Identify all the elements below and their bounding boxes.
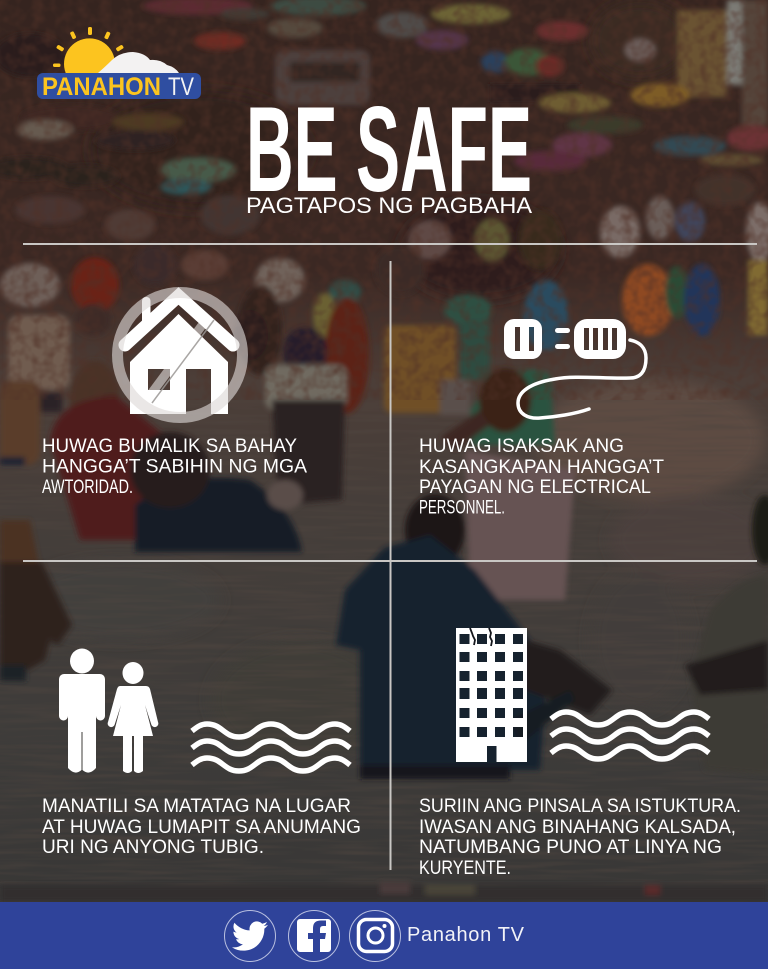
- text block: panel 1: HUWAG BUMALIK SA BAHAY: [42, 436, 297, 457]
- footer bar: [0, 902, 768, 969]
- panel: do not plug appliances: [419, 319, 664, 518]
- text block: panel 2: [419, 436, 664, 518]
- icon: cracked building: [456, 628, 527, 762]
- logo: Panahon TV: TV: [168, 73, 194, 101]
- text block: panel 3: MANATILI SA MATATAG NA LUGAR: [42, 796, 351, 817]
- text block: panel 4: KURYENTE.: [419, 858, 511, 879]
- text block: panel 1: AWTORIDAD.: [42, 477, 133, 498]
- text block: panel 4: NATUMBANG PUNO AT LINYA NG: [419, 837, 722, 858]
- text block: panel 4: [419, 796, 741, 879]
- footer label: Panahon TV: [407, 924, 525, 946]
- text block: panel 2: PAYAGAN NG ELECTRICAL: [419, 477, 651, 498]
- top-right crowd: [677, 10, 727, 97]
- divider lines: [23, 243, 757, 870]
- panel: inspect damage: [419, 628, 741, 879]
- icon: man and woman: [59, 648, 158, 773]
- text block: panel 2: HUWAG ISAKSAK ANG: [419, 436, 624, 457]
- foreground figures lower: [0, 562, 72, 670]
- text block: panel 3: URI NG ANYONG TUBIG.: [42, 837, 264, 858]
- icon: water waves: [192, 724, 350, 771]
- text block: panel 4: IWASAN ANG BINAHANG KALSADA,: [419, 817, 736, 838]
- text block: panel 3: AT HUWAG LUMAPIT SA ANUMANG: [42, 817, 361, 838]
- icon: twitter: [224, 910, 276, 962]
- text block: panel 2: KASANGKAPAN HANGGA’T: [419, 457, 664, 478]
- text block: panel 1: [42, 436, 307, 498]
- icon: water waves: [551, 712, 709, 759]
- icon: house with prohibition sign: [118, 292, 242, 418]
- panel: stay on firm ground: [42, 648, 361, 858]
- mid crowd: [748, 260, 768, 335]
- text block: panel 1: HANGGA’T SABIHIN NG MGA: [42, 456, 307, 478]
- icon: plug and outlet with cable: [504, 319, 646, 418]
- panel: do not return home: [42, 292, 307, 498]
- icon: instagram: [350, 910, 400, 962]
- subtitle: PAGTAPOS NG PAGBAHA: [246, 193, 532, 218]
- foreground figures upper: [470, 370, 555, 445]
- logo: Panahon TV: [37, 27, 201, 101]
- logo: Panahon TV: PANAHON: [42, 73, 161, 101]
- text block: panel 4: SURIIN ANG PINSALA SA ISTUKTURA.: [419, 796, 741, 817]
- title: BE SAFE: [246, 81, 532, 217]
- top-left crowd: [275, 50, 370, 105]
- icon: facebook: [288, 910, 340, 962]
- text block: panel 3: [42, 796, 361, 858]
- text block: panel 2: PERSONNEL.: [419, 498, 505, 518]
